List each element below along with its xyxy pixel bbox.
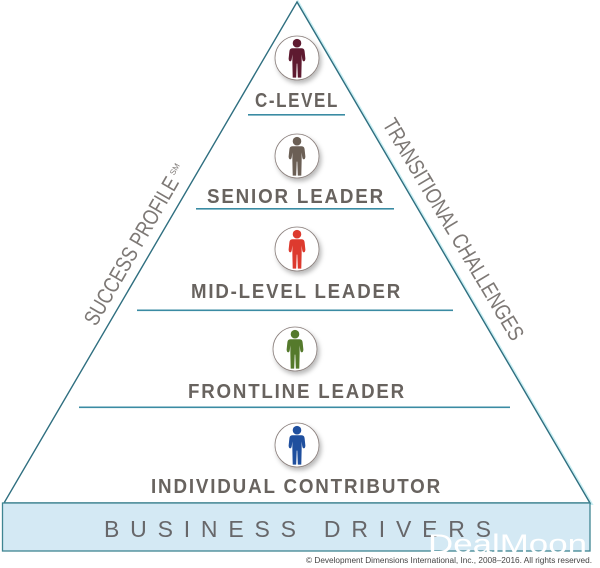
band label: BUSINESS DRIVERS: [104, 516, 491, 542]
icon: mid-level leader person: [275, 227, 319, 271]
mid-level leader label: MID-LEVEL LEADER: [191, 280, 402, 303]
copyright: © Development Dimensions International, Inc., 2008–2016. All rights reserved.: [306, 556, 592, 565]
business drivers band: [2, 503, 590, 551]
tier: individual contributor: [151, 423, 442, 498]
frontline leader divider: [79, 406, 510, 408]
frontline leader label: FRONTLINE LEADER: [188, 380, 406, 403]
tier: C-level: [248, 36, 345, 116]
side label: transitional challenges: TRANSITIONAL CHALLENGES: [378, 114, 529, 345]
icon: individual contributor person: [275, 423, 319, 467]
senior leader divider: [196, 208, 394, 210]
side label: success profile: SM: [168, 162, 182, 177]
icon: frontline leader person: [273, 327, 317, 371]
side label: success profile: SUCCESS PROFILE: [79, 172, 184, 330]
tier: senior leader: [196, 134, 394, 210]
watermark: DealMoon: [428, 529, 587, 559]
individual contributor label: INDIVIDUAL CONTRIBUTOR: [151, 475, 442, 498]
tier: mid-level leader: [137, 227, 453, 311]
C-level divider: [248, 114, 345, 116]
mid-level leader divider: [137, 310, 453, 311]
icon: C-level person: [275, 36, 319, 80]
tier: frontline leader: [79, 327, 510, 408]
icon: senior leader person: [275, 134, 319, 178]
C-level label: C-LEVEL: [255, 89, 339, 112]
senior leader label: SENIOR LEADER: [207, 185, 385, 208]
